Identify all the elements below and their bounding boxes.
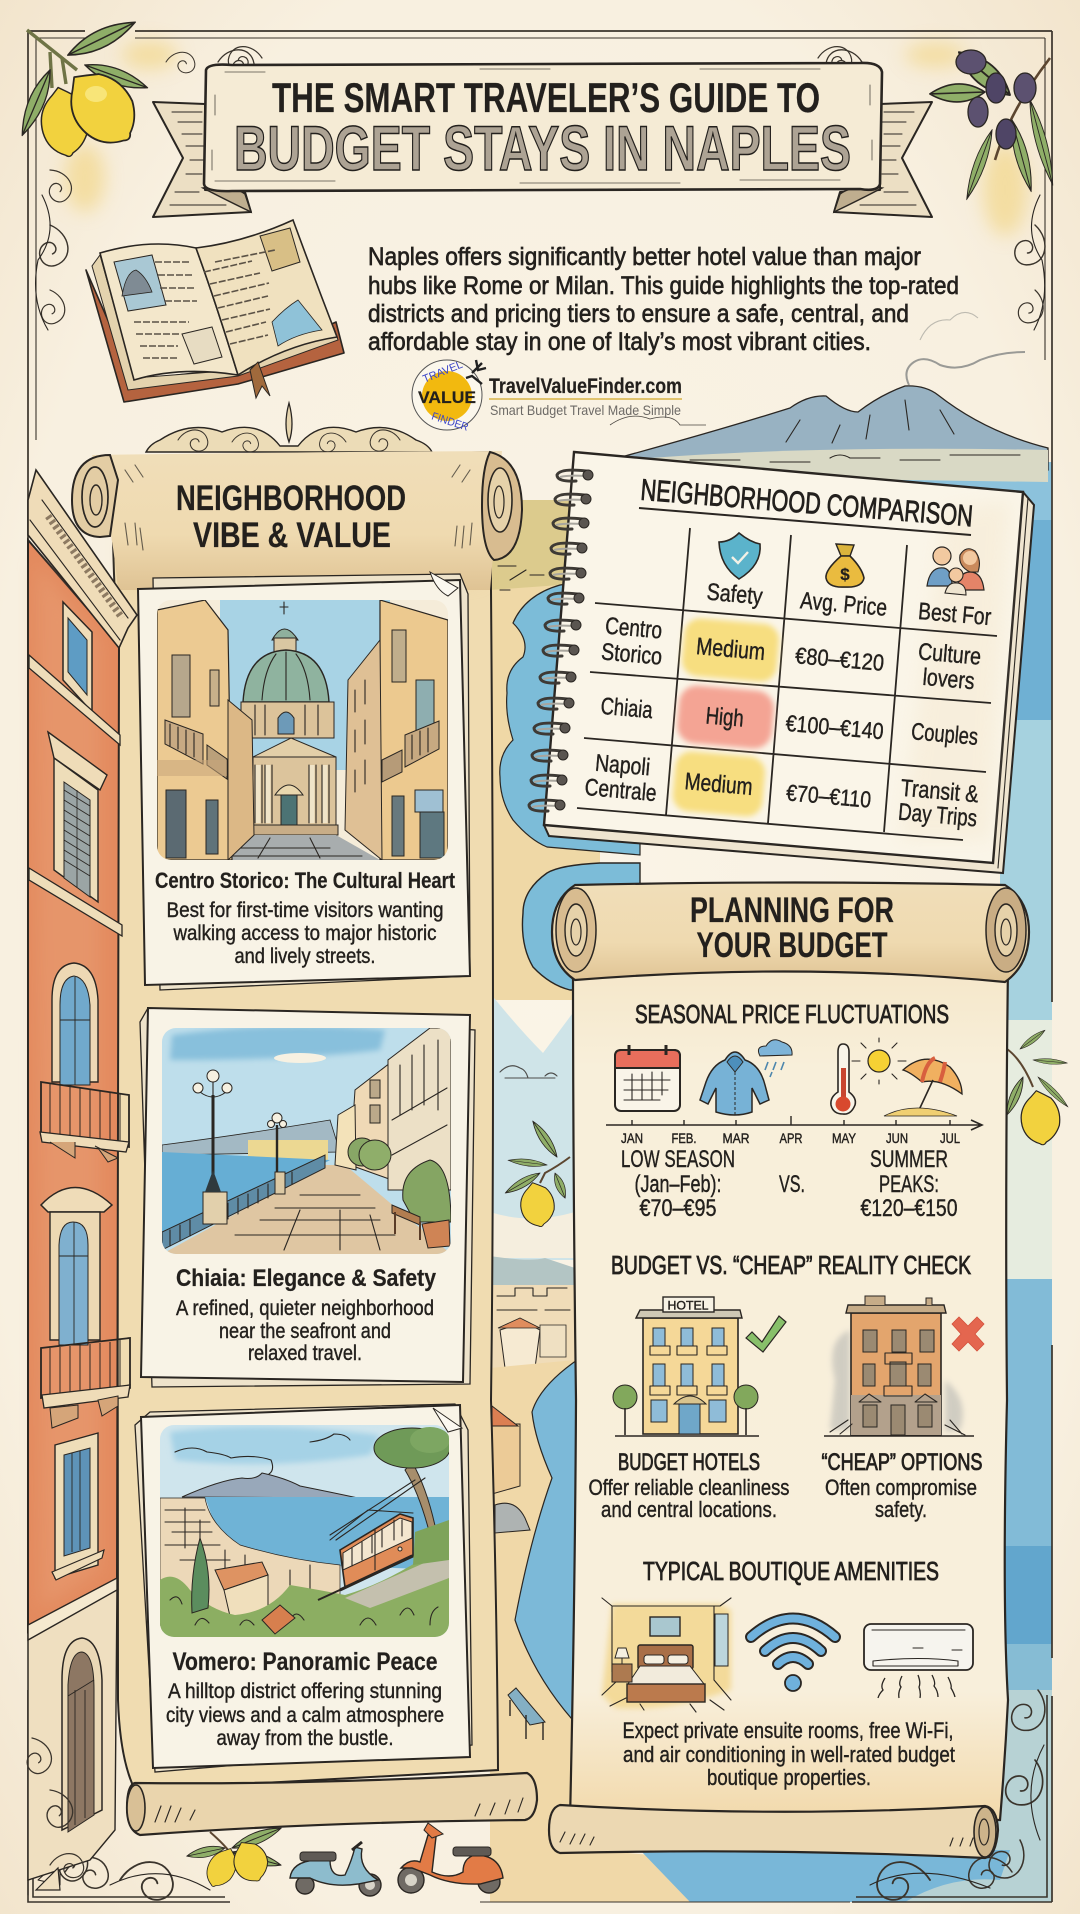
low season text: LOW SEASON	[621, 1146, 735, 1173]
row: Centro Storico	[600, 613, 982, 695]
top roll right	[482, 452, 522, 560]
lemon sprig in right margin	[1003, 1028, 1070, 1147]
month labels: MAR	[722, 1130, 750, 1146]
row: Chiaia: High	[705, 702, 745, 733]
funicular car	[330, 1510, 413, 1590]
upper window	[63, 602, 92, 712]
budget hotels text	[588, 1449, 790, 1522]
icon: sun	[852, 1038, 906, 1084]
heading: PLANNING FOR	[690, 891, 894, 930]
icon: rain jacket	[700, 1052, 769, 1115]
panel: neighborhood vibe scroll	[19, 451, 1070, 1896]
roll end right	[986, 888, 1026, 972]
greenery	[160, 1550, 449, 1637]
card title: Centro Storico: The Cultural Heart	[155, 868, 456, 893]
gutter bay	[515, 1358, 580, 1728]
right margin sea lower	[1006, 1279, 1052, 1546]
amenities text: Expect private ensuite rooms, free Wi-Fi,	[622, 1718, 954, 1743]
cheap options text: safety.	[875, 1497, 927, 1522]
low season text: €70–€95	[640, 1195, 716, 1222]
ledge	[29, 655, 120, 745]
arched window with balcony	[40, 963, 129, 1162]
icon: budget hotel	[613, 1297, 759, 1436]
distant volcano	[182, 1473, 358, 1498]
gutter town	[492, 1285, 574, 1368]
banner left tail	[153, 102, 251, 217]
logo: TravelValueFinder: VALUE	[418, 388, 476, 407]
title line two: BUDGET STAYS IN NAPLES	[234, 114, 851, 184]
intro paragraph	[368, 243, 959, 356]
pediment window with balcony	[41, 1188, 130, 1428]
icon: budget hotel: HOTEL	[668, 1298, 709, 1312]
top roll	[552, 882, 1029, 982]
bottom roll	[127, 1773, 537, 1835]
summer peaks text: SUMMER	[870, 1146, 948, 1173]
gutter sea	[500, 575, 640, 855]
row: Centro Storico: Culture	[917, 638, 982, 671]
panel: neighborhood vibe scroll: VIBE & VALUE	[193, 516, 391, 555]
panel: planning for your budget scroll: YOUR BUDGET	[696, 926, 888, 965]
icon: thermometer	[831, 1044, 855, 1114]
right margin pale sky	[1006, 1020, 1052, 1280]
icon: air conditioner	[864, 1624, 973, 1698]
upper land on gutter	[492, 500, 569, 590]
planters	[348, 1138, 451, 1248]
distant hills	[162, 1120, 340, 1155]
cheap options text: “CHEAP” OPTIONS	[822, 1449, 982, 1476]
right buildings	[345, 600, 448, 860]
illustration: hilltop funicular view	[160, 1425, 450, 1637]
row: Napoli Centrale: Transit &	[900, 775, 980, 808]
icon: rain cloud	[758, 1040, 792, 1077]
low season text: (Jan–Feb):	[634, 1171, 722, 1198]
month labels: FEB.	[672, 1130, 696, 1146]
scroll washes	[125, 530, 480, 585]
bottom roll	[549, 1805, 998, 1858]
icon: wifi	[751, 1618, 835, 1691]
cheap options text	[822, 1449, 982, 1522]
logo: TravelValueFinder	[412, 359, 682, 434]
card description: near the seafront and	[219, 1320, 391, 1343]
card description: relaxed travel.	[248, 1342, 362, 1365]
row: Centro Storico: Medium	[695, 633, 766, 666]
bay	[205, 1497, 449, 1570]
roof cornice	[28, 470, 137, 648]
scroll hatching	[125, 465, 472, 550]
illustration: domed church street	[157, 600, 448, 860]
banner right tail	[834, 102, 932, 217]
column headers: Avg. Price	[799, 587, 888, 622]
month labels: JUN	[886, 1130, 908, 1146]
subheading: amenities: TYPICAL BOUTIQUE AMENITIES	[643, 1556, 939, 1586]
intro paragraph: affordable stay in one of Italy’s most vibrant cities.	[368, 328, 871, 356]
banner hatching and folds	[170, 112, 916, 205]
gutter small building	[493, 1424, 520, 1494]
icon: hotel bedroom	[602, 1598, 731, 1712]
low season text	[621, 1146, 735, 1222]
church	[241, 602, 338, 835]
notebook page	[544, 452, 1023, 863]
column headers	[706, 579, 992, 631]
summer peaks text: PEAKS:	[879, 1171, 939, 1198]
month labels: JUL	[940, 1130, 960, 1146]
icon: calendar	[615, 1045, 680, 1111]
summer peaks text	[860, 1146, 958, 1222]
icon: safety shield	[719, 533, 760, 579]
card description: city views and a calm atmosphere	[166, 1704, 444, 1727]
promenade	[162, 1165, 451, 1254]
card description	[176, 1297, 434, 1365]
banner panel	[204, 63, 882, 191]
row: Chiaia: Chiaia	[600, 693, 654, 724]
lamp posts	[193, 1070, 286, 1192]
column headers: Safety	[706, 579, 764, 610]
shuttered window	[48, 732, 107, 902]
title banner	[153, 63, 932, 217]
intro paragraph: Naples offers significantly better hotel value than major	[368, 243, 921, 271]
logo: TravelValueFinder: TRAVEL	[421, 359, 465, 386]
card description: away from the bustle.	[216, 1727, 394, 1750]
row: Napoli Centrale: Centrale	[584, 774, 658, 807]
logo: TravelValueFinder: FINDER	[430, 411, 470, 434]
top roll band	[92, 451, 502, 590]
row: Chiaia: Couples	[910, 718, 979, 751]
map background: bay of Naples	[490, 462, 1052, 1902]
pine tree	[374, 1427, 450, 1565]
watercolor yellow splashes	[65, 41, 1027, 236]
second bay beside planning scroll	[522, 863, 640, 990]
right margin sea upper	[1016, 520, 1052, 720]
row: Napoli Centrale: Medium	[684, 768, 754, 801]
card description: A hilltop district offering stunning	[168, 1680, 442, 1703]
budget hotels text: Offer reliable cleanliness	[588, 1475, 790, 1500]
table grid	[577, 528, 997, 840]
illustration: seafront promenade	[162, 1026, 451, 1254]
coral wall	[28, 540, 119, 1632]
sea	[162, 1152, 330, 1240]
banner texture	[212, 69, 872, 183]
column headers: Best For	[917, 598, 992, 631]
sea top beneath notebook	[898, 462, 1052, 520]
card description: A refined, quieter neighborhood	[176, 1297, 434, 1320]
card description: Best for first-time visitors wanting	[166, 899, 444, 922]
scroll body	[570, 965, 1008, 1820]
card: Vomero	[135, 1404, 472, 1772]
cream lower wall	[28, 1585, 117, 1880]
intro paragraph: districts and pricing tiers to ensure a safe, central, and	[368, 300, 909, 328]
icon: blue scooter	[290, 1842, 381, 1896]
ornament above left scroll	[146, 403, 432, 452]
funicular track	[318, 1540, 449, 1600]
icon: check mark	[746, 1316, 786, 1352]
title line one: THE SMART TRAVELER’S GUIDE TO	[272, 74, 820, 121]
arched door	[62, 1638, 102, 1832]
card description	[166, 899, 444, 968]
icon: orange scooter	[398, 1823, 503, 1893]
heading: NEIGHBORHOOD	[176, 479, 406, 518]
corner ornament over door	[19, 1734, 84, 1890]
bottom sand	[575, 1853, 690, 1902]
scroll body	[112, 452, 498, 1790]
corner wash	[900, 1690, 1052, 1902]
street	[228, 835, 380, 860]
building facade on left	[28, 470, 137, 1895]
budget hotels text: BUDGET HOTELS	[618, 1449, 760, 1476]
card description	[166, 1680, 444, 1750]
notebook back pages	[544, 492, 1034, 873]
row: Napoli Centrale: €70–€110	[785, 779, 872, 813]
icon: family	[927, 547, 984, 595]
gutter lower sand	[490, 1360, 574, 1846]
ledge	[29, 868, 122, 936]
cheap options text: Often compromise	[825, 1475, 977, 1500]
row: Napoli Centrale	[584, 750, 980, 832]
row: Napoli Centrale: Napoli	[594, 750, 651, 781]
row: Chiaia	[600, 684, 979, 751]
lemon branch top left	[15, 15, 151, 160]
roll end left	[556, 888, 596, 972]
month labels: MAY	[832, 1130, 857, 1146]
amenities text: boutique properties.	[707, 1765, 871, 1790]
row: Centro Storico: €80–€120	[794, 642, 885, 676]
month labels: APR	[780, 1130, 802, 1146]
top roll left	[72, 455, 118, 537]
left buildings	[157, 600, 254, 860]
olive branch top right	[930, 44, 1058, 201]
lemons at bottom	[186, 1823, 283, 1892]
amenities text: and air conditioning in well-rated budget	[623, 1742, 955, 1767]
budget hotels text: and central locations.	[601, 1497, 777, 1522]
lemon sprig in left gutter	[503, 1119, 570, 1230]
card title: Vomero: Panoramic Peace	[172, 1648, 438, 1676]
icon: money bag	[826, 544, 864, 587]
card: Centro Storico	[138, 572, 470, 990]
icon: open travel journal	[86, 220, 344, 402]
lower window	[52, 1433, 104, 1580]
panel: planning for your budget scroll	[549, 882, 1029, 1858]
row: Centro Storico: Storico	[600, 638, 663, 671]
gutter blue beach chair	[508, 1688, 545, 1725]
spiral binding	[529, 470, 593, 811]
panel: neighborhood comparison notebook	[529, 452, 1034, 873]
card description: walking access to major historic	[173, 922, 437, 945]
gutter hills	[493, 1256, 574, 1285]
bottom sea	[640, 1850, 1010, 1902]
timeline arrow	[606, 1116, 982, 1130]
volcano: Vesuvius	[610, 312, 1048, 482]
card title: Chiaia: Elegance & Safety	[176, 1265, 437, 1292]
logo: TravelValueFinder: TravelValueFinder.com	[489, 375, 682, 398]
intro paragraph: hubs like Rome or Milan. This guide highlights the top-rated	[368, 272, 959, 300]
card description: and lively streets.	[234, 945, 376, 968]
icon: cheap building	[824, 1296, 974, 1436]
icon: beach umbrella	[884, 1058, 962, 1116]
right margin pale sea	[1000, 720, 1052, 1022]
subheading: seasonal: SEASONAL PRICE FLUCTUATIONS	[635, 999, 949, 1029]
icon: money bag: $	[840, 565, 850, 584]
row: Centro Storico: lovers	[922, 664, 976, 695]
row: Chiaia: €100–€140	[785, 710, 885, 744]
palazzi	[335, 1028, 451, 1190]
summer peaks text: €120–€150	[860, 1195, 958, 1222]
month labels	[621, 1130, 960, 1146]
amenities text	[622, 1718, 955, 1790]
row: Centro Storico: Centro	[604, 613, 663, 644]
row: Napoli Centrale: Day Trips	[897, 799, 978, 832]
month labels: JAN	[621, 1130, 643, 1146]
railing	[162, 1155, 325, 1250]
gutter pale sky	[490, 993, 575, 1260]
card: Chiaia	[140, 1008, 475, 1387]
versus label: VS.	[779, 1171, 805, 1198]
icon: cross mark	[952, 1317, 984, 1351]
town	[160, 1498, 340, 1630]
logo: TravelValueFinder: Smart Budget Travel Made Simple	[490, 402, 681, 418]
